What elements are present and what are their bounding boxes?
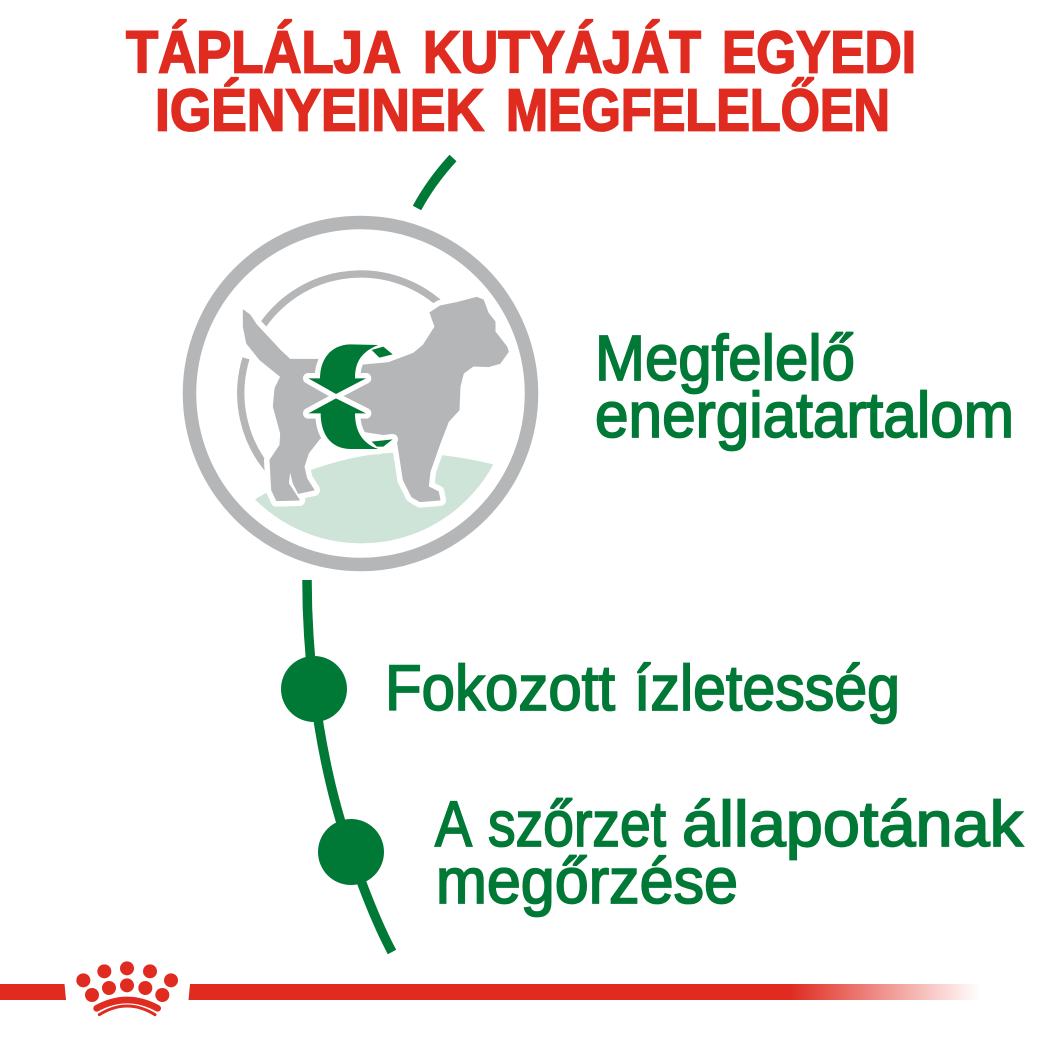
- heading: palatability: Fokozott: [385, 652, 615, 724]
- title: EGYEDI: [722, 20, 916, 86]
- heading: energy: energiatartalom: [595, 379, 1014, 451]
- heading: coat: [435, 788, 1024, 917]
- title: KUTYÁJÁT: [423, 20, 701, 86]
- green line top segment: [417, 158, 453, 208]
- title: IGÉNYEINEK: [155, 78, 484, 144]
- dog silhouette: [243, 297, 508, 502]
- green circular arrows: [308, 344, 393, 449]
- heading: energy: [595, 322, 1014, 451]
- bullet dot 2: [318, 819, 384, 885]
- heading: energy: Megfelelő: [595, 322, 855, 394]
- heading: coat: A: [435, 788, 472, 860]
- heading: palatability: ízletesség: [634, 652, 900, 724]
- title: TÁPLÁLJA: [126, 20, 401, 86]
- title: [126, 20, 916, 144]
- icon: dog energy circle: [190, 222, 532, 564]
- heading: coat: szőrzet: [488, 788, 666, 860]
- icon: royal canin crown: [76, 961, 178, 1015]
- green curved line: [307, 580, 392, 952]
- bullet dot 1: [281, 656, 347, 722]
- heading: coat: megőrzése: [436, 845, 738, 917]
- inner grey arc: [241, 274, 440, 473]
- title: MEGFELELŐEN: [506, 78, 890, 144]
- heading: palatability: [385, 652, 900, 724]
- dog white halo: [243, 297, 508, 502]
- green ground: [255, 453, 493, 543]
- red band right: [188, 984, 980, 1000]
- outer grey ring: [190, 222, 532, 564]
- red band left: [0, 984, 66, 1000]
- heading: coat: állapotának: [682, 788, 1024, 860]
